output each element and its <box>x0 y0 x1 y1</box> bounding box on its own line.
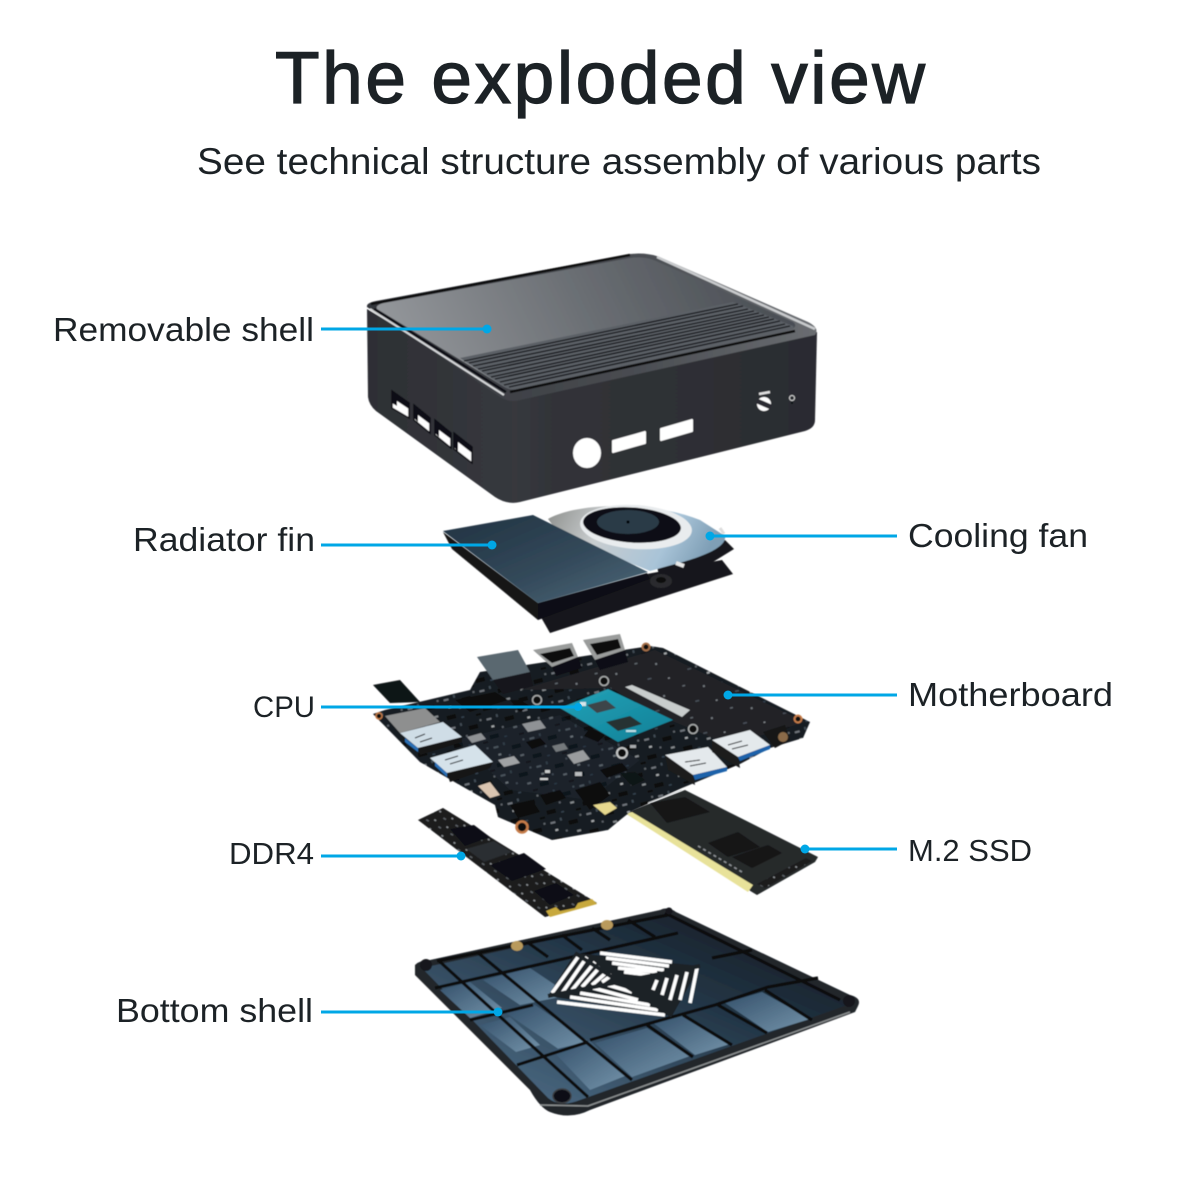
shell ribbed band <box>460 302 794 390</box>
label: M.2 SSD: M.2 SSD <box>908 833 1032 868</box>
board base <box>373 646 810 840</box>
cooling fan housing <box>548 501 725 571</box>
radiator fin block <box>443 515 650 620</box>
label: Removable shell: Removable shell <box>53 311 314 348</box>
title: The exploded view <box>275 38 925 119</box>
CPU package <box>560 689 673 742</box>
label sticker <box>625 685 690 717</box>
label: Radiator fin <box>133 521 496 558</box>
label: Cooling fan: Cooling fan <box>908 517 1088 554</box>
USB ports right <box>665 725 790 785</box>
label: Bottom shell <box>116 992 502 1029</box>
rear ports <box>373 634 628 703</box>
label: Radiator fin: Radiator fin <box>133 521 315 558</box>
board mounting holes <box>376 644 802 832</box>
part: removable shell <box>367 254 817 503</box>
label: DDR4: DDR4 <box>229 836 314 871</box>
shell top plate <box>377 257 795 389</box>
shell front ports <box>574 420 692 467</box>
label: M.2 SSD <box>800 833 1032 868</box>
USB ports left <box>385 708 493 782</box>
tray floor <box>422 915 850 1104</box>
label: DDR4 <box>229 836 466 871</box>
label: CPU <box>253 691 582 724</box>
part: bottom shell <box>415 908 859 1116</box>
label: Bottom shell: Bottom shell <box>116 992 313 1029</box>
label: Removable shell <box>53 311 492 348</box>
part: M.2 SSD module <box>418 808 597 917</box>
tray ribs <box>435 913 840 1097</box>
light panels <box>440 968 810 1090</box>
subtitle: See technical structure assembly of various parts <box>197 141 1041 182</box>
fan grille <box>548 953 700 1016</box>
label: Cooling fan <box>706 517 1088 554</box>
tray outline <box>415 908 859 1116</box>
board upper clear area <box>520 650 805 745</box>
label: CPU: CPU <box>253 691 315 724</box>
part: DDR4 RAM module <box>625 790 818 895</box>
label: Motherboard: Motherboard <box>908 676 1113 713</box>
board components <box>455 692 682 818</box>
cooling base plate <box>538 560 733 633</box>
label: Motherboard <box>724 676 1113 713</box>
shell power button <box>757 392 794 411</box>
shell left ports <box>392 391 472 463</box>
tray screw posts <box>420 908 855 1103</box>
part: cooling module <box>443 501 734 633</box>
tray rim <box>540 1012 850 1106</box>
part: motherboard <box>373 634 810 840</box>
